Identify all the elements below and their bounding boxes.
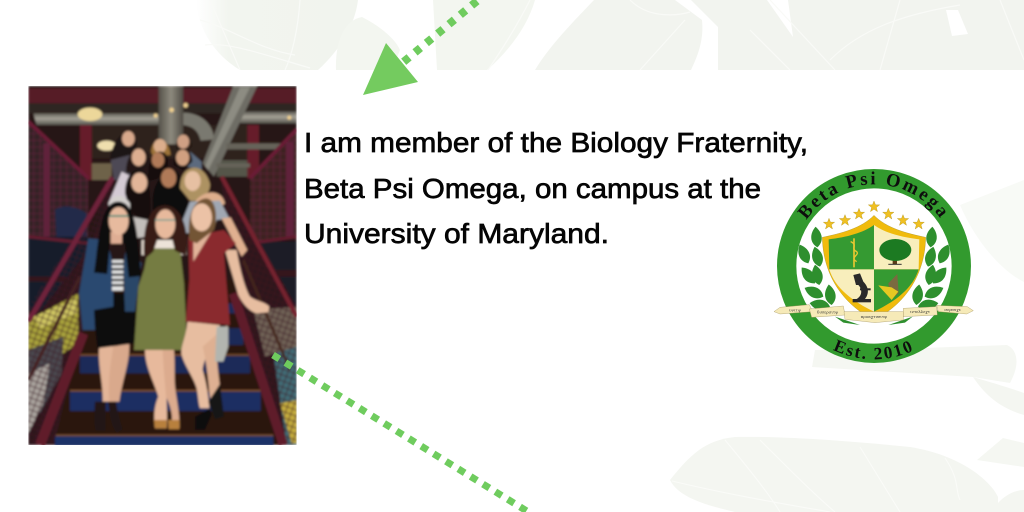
laurel leaves	[795, 226, 953, 325]
icon: rod of Asclepius	[851, 238, 857, 267]
banner: ιντελλεχτ	[910, 309, 931, 314]
icon: bird	[878, 274, 899, 300]
photo background	[28, 86, 297, 445]
crest name: Beta Psi Omega	[797, 171, 946, 220]
front left woman	[79, 202, 142, 433]
banner	[774, 305, 973, 323]
background leaves: lower right	[670, 180, 1024, 512]
shield	[822, 215, 926, 320]
left railing	[28, 208, 108, 444]
icon: tree	[879, 239, 911, 264]
body text: I am member of the Biology Fraternity,	[304, 127, 808, 158]
logo: Beta Psi Omega crest	[774, 169, 974, 363]
icon: microscope	[853, 273, 871, 302]
front right woman	[181, 198, 269, 430]
body text: University of Maryland.	[304, 218, 609, 249]
photo: group on staircase	[28, 86, 297, 446]
right railing	[234, 238, 296, 394]
dotted arrow line: bottom, leaving the photo	[273, 355, 530, 512]
banner: σερϖιχε	[944, 307, 961, 312]
banner: διϖερσιτψ	[817, 310, 838, 315]
stars	[823, 201, 924, 229]
banner: υνιτψ	[789, 308, 801, 313]
arrowhead	[363, 43, 418, 95]
crest ring	[787, 179, 961, 353]
front middle woman	[134, 205, 187, 429]
back row of people	[110, 136, 136, 158]
crest date: Est. 2010	[832, 340, 912, 360]
staircase	[50, 280, 283, 445]
side galleries	[28, 123, 88, 240]
banner: προαχτιϖιτψ	[861, 314, 887, 319]
background leaves: top band	[196, 0, 1024, 70]
middle row of people	[108, 172, 132, 203]
dotted arrow line: top	[401, 1, 477, 64]
body text: Beta Psi Omega, on campus at the	[304, 173, 761, 204]
body text	[304, 127, 808, 249]
